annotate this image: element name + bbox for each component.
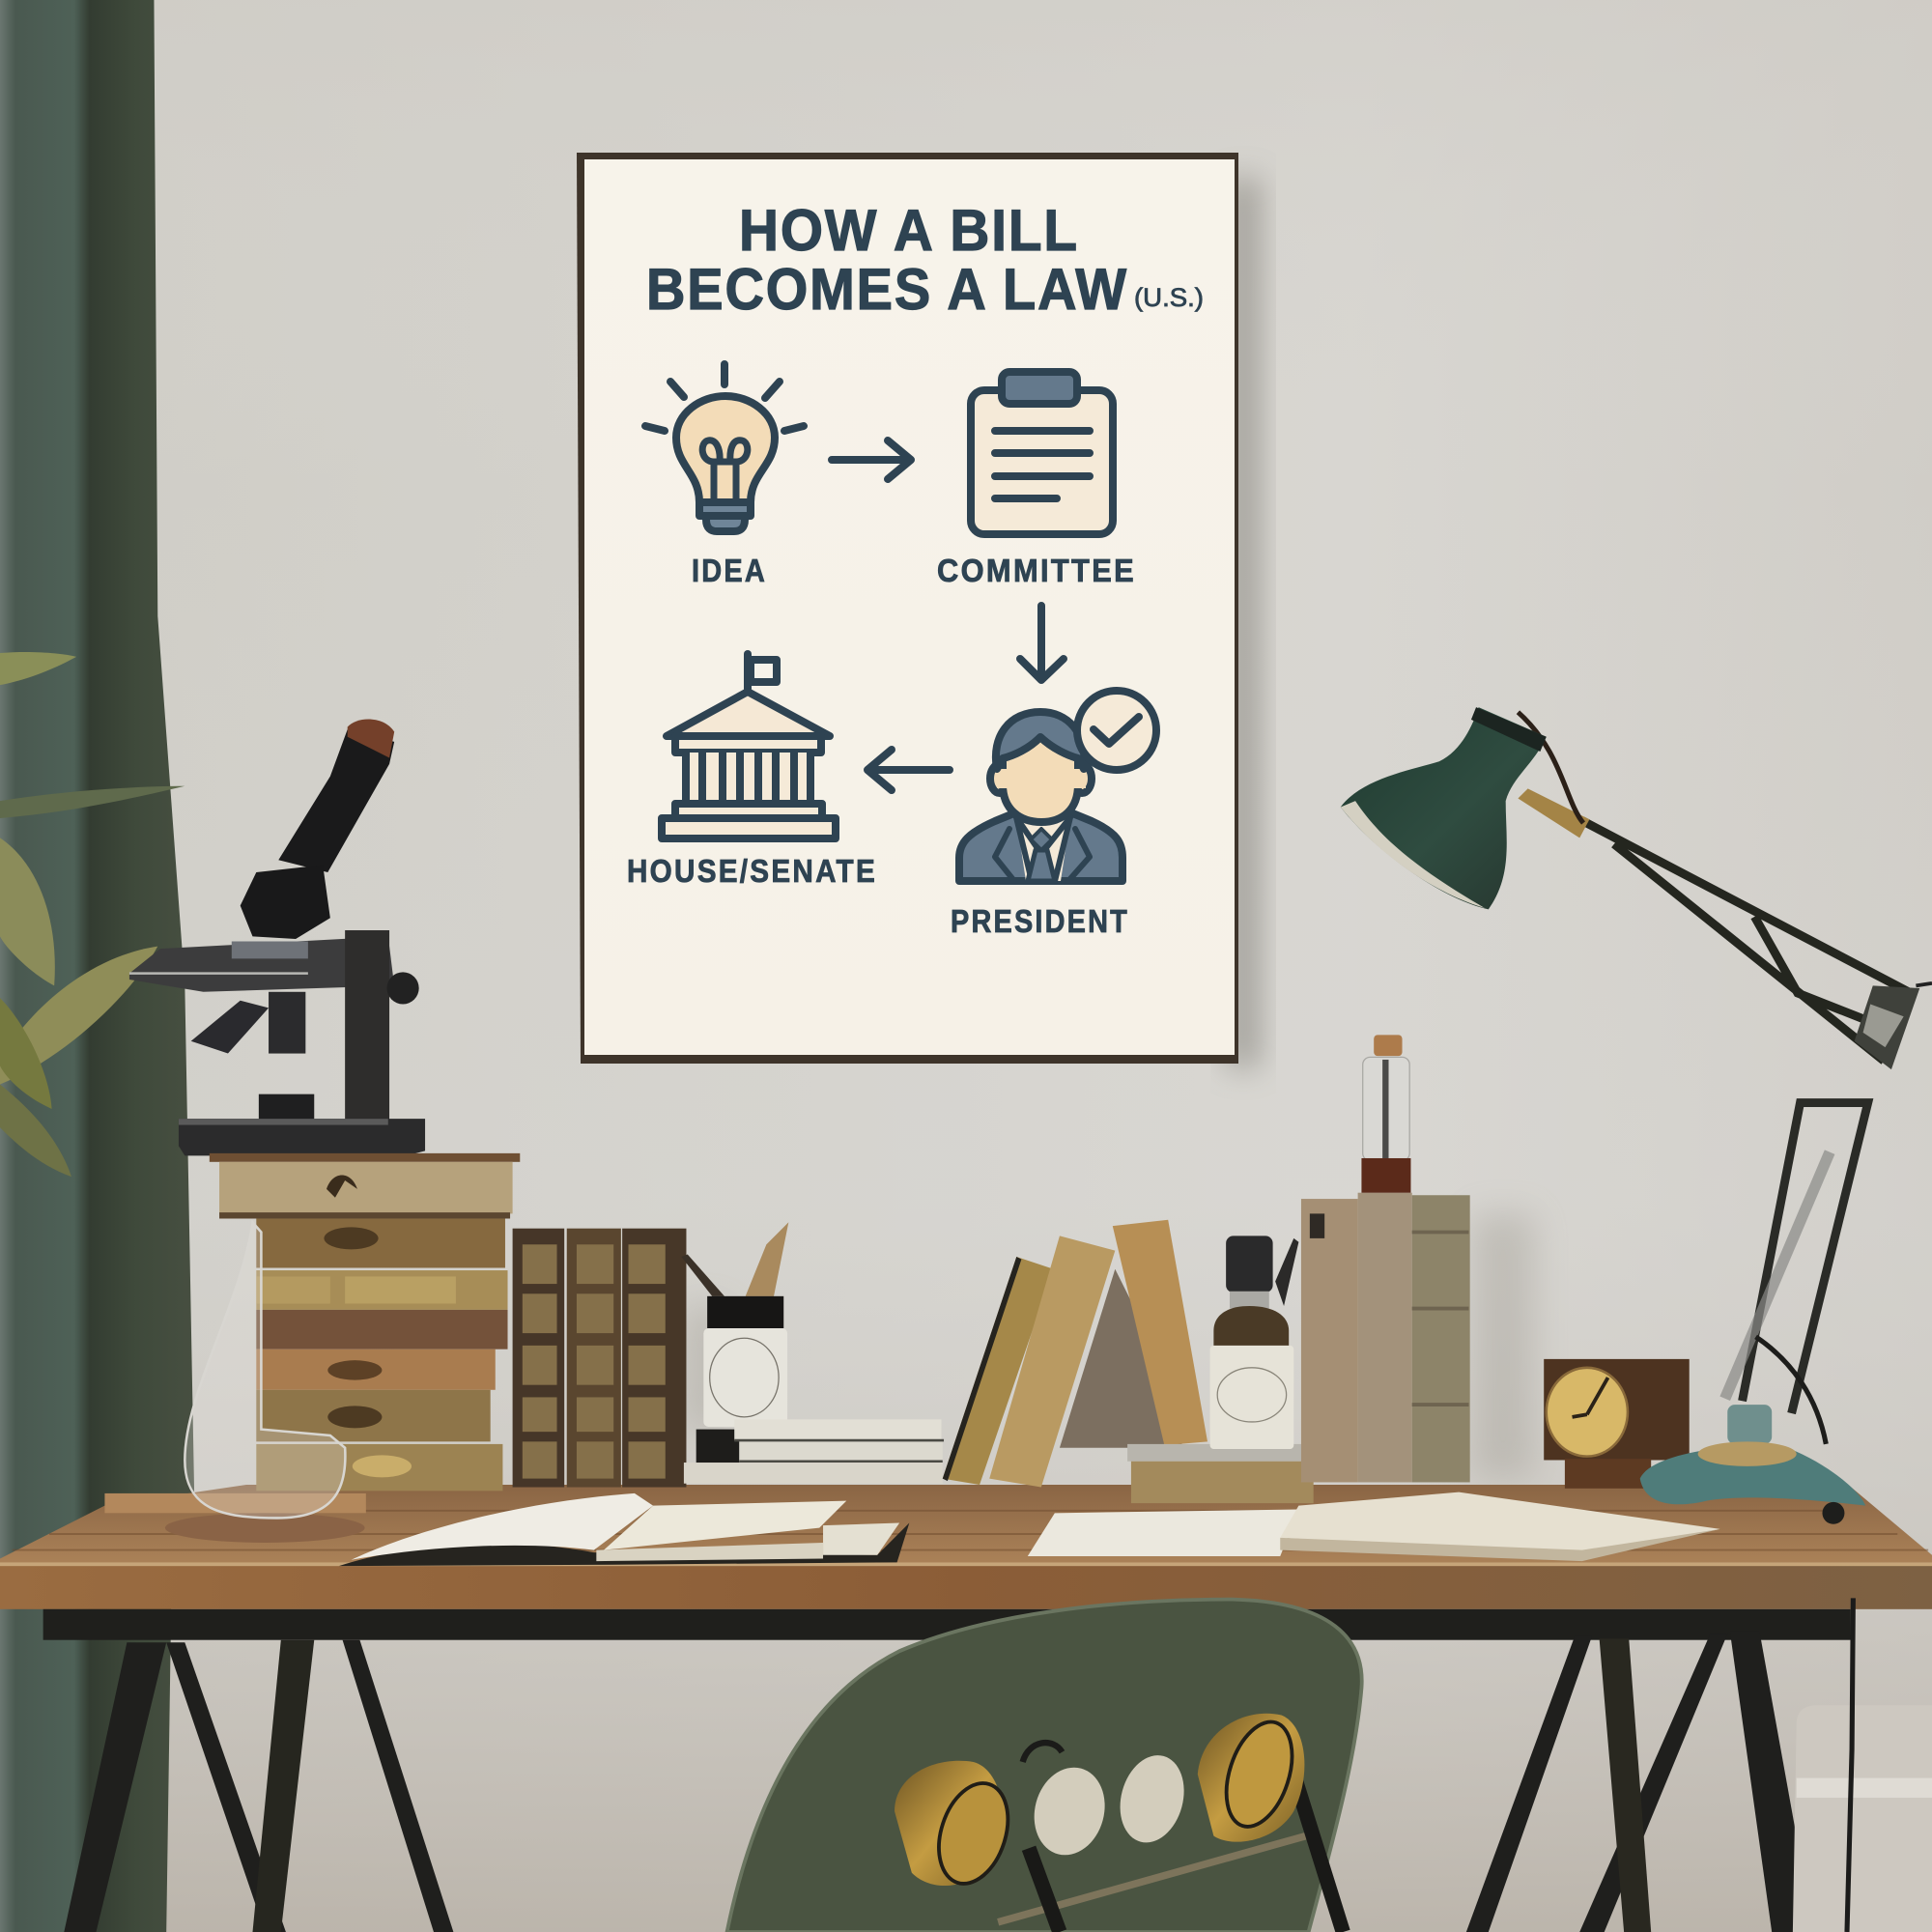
chair back — [727, 1600, 1362, 1932]
desk lamp — [1341, 707, 1932, 1069]
open notebook on desk — [339, 1493, 909, 1566]
title: (U.S.) — [1134, 283, 1204, 312]
glass vase and coaster — [104, 1222, 366, 1543]
microscope — [129, 719, 425, 1155]
icon: light bulb — [645, 364, 804, 531]
poster: how a bill becomes a law — [577, 153, 1238, 1064]
open book on desk — [1028, 1492, 1720, 1561]
pen pot — [681, 1222, 788, 1427]
ink bottle — [1210, 1236, 1298, 1449]
upright antique books — [513, 1229, 686, 1488]
arrow: idea to committee — [832, 440, 911, 479]
plant leaves — [0, 652, 185, 1177]
stacked antique books — [210, 1153, 520, 1491]
label: committee: COMMITTEE — [937, 553, 1136, 588]
poster frame — [577, 153, 1238, 1064]
label: idea: IDEA — [692, 553, 767, 588]
desk top — [0, 1485, 1932, 1609]
trestle legs — [64, 1632, 1814, 1932]
power cord and white box — [1793, 1598, 1932, 1932]
poster paper — [584, 159, 1235, 1055]
tall tan books — [1301, 1193, 1470, 1482]
poster shadow — [1227, 179, 1260, 1067]
title — [646, 198, 1204, 322]
icon: president with check badge — [959, 691, 1156, 881]
desk clock — [1544, 1359, 1690, 1489]
arrow: committee to president — [1020, 606, 1064, 680]
leaning books — [943, 1220, 1208, 1488]
curtain — [0, 0, 195, 1932]
arrow: president to house and senate — [867, 750, 950, 790]
icon: clipboard — [971, 372, 1113, 534]
small white books — [684, 1419, 944, 1484]
icon: capitol building — [662, 654, 836, 838]
wall shadows behind objects — [684, 1213, 1534, 1479]
corked bottle — [1361, 1035, 1410, 1193]
title: BECOMES A LAW — [646, 257, 1128, 322]
label: house and senate: HOUSE/SENATE — [627, 853, 877, 889]
small book under bottle — [1127, 1444, 1314, 1503]
lamp stand — [1640, 1103, 1868, 1524]
title: HOW A BILL — [739, 198, 1079, 263]
desk apron — [43, 1609, 1851, 1640]
label: president: PRESIDENT — [951, 903, 1129, 939]
